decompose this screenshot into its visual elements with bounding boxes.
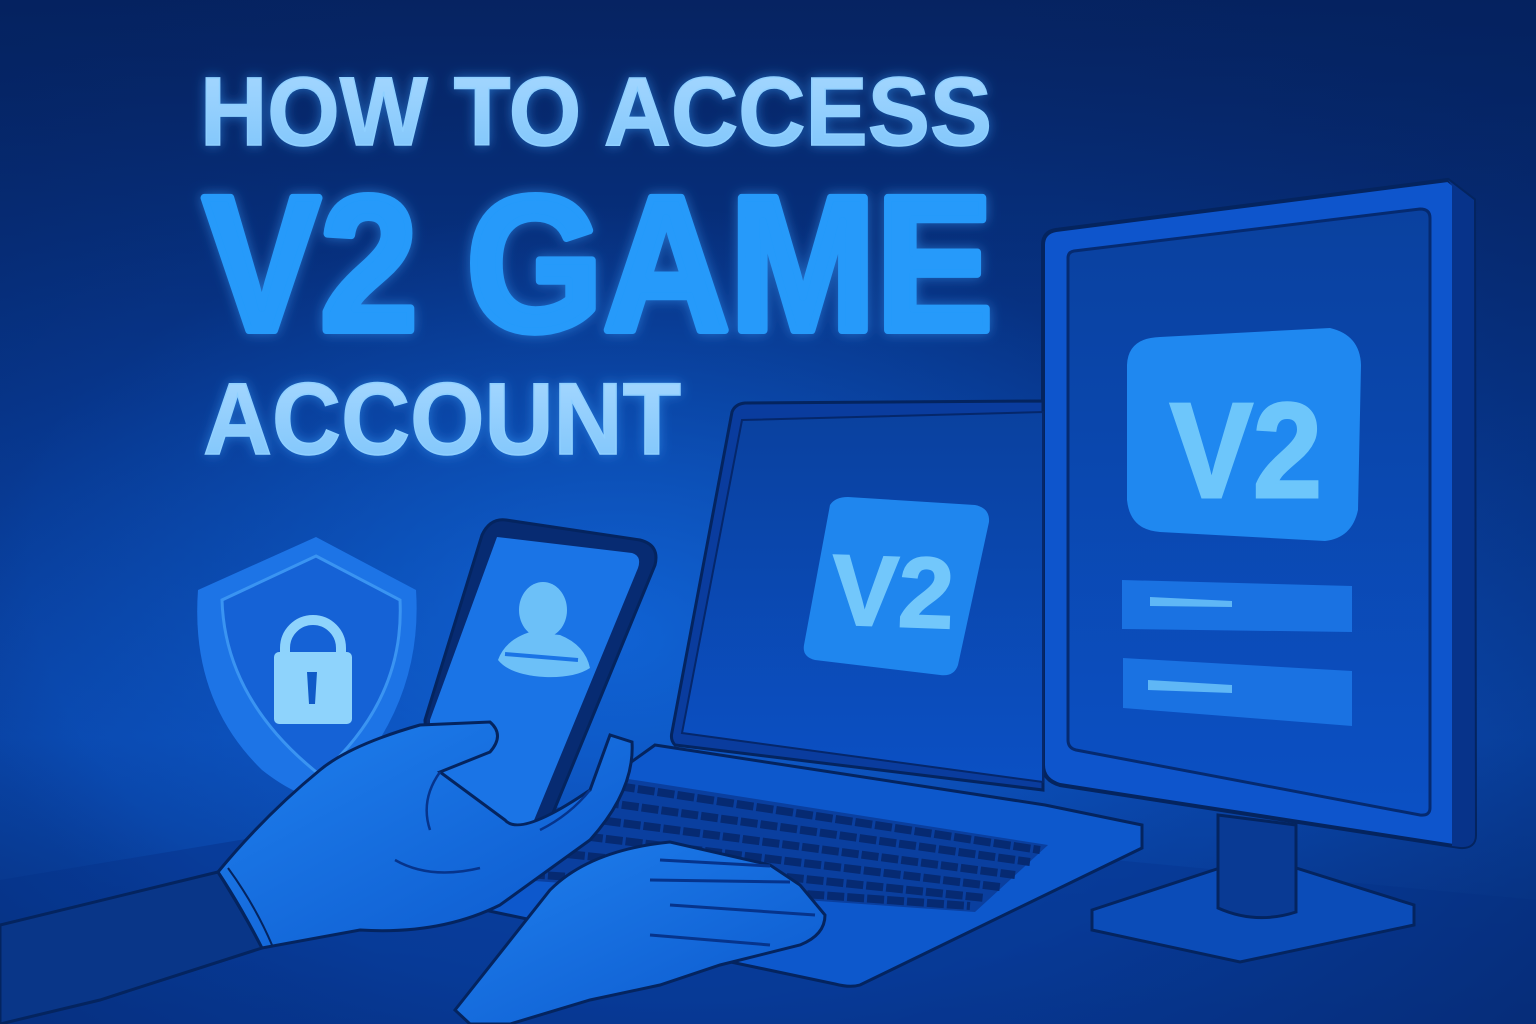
login field 2 bbox=[1123, 658, 1352, 726]
monitor screen bbox=[1068, 209, 1430, 815]
laptop bbox=[475, 401, 1142, 986]
finger creases bbox=[395, 772, 590, 872]
monitor v2 logo: V2 bbox=[1170, 375, 1322, 526]
laptop v2 logo: V2 bbox=[830, 534, 956, 650]
hand holding phone bbox=[218, 722, 632, 948]
monitor stand bbox=[1092, 815, 1414, 962]
monitor body bbox=[1043, 180, 1475, 847]
lock icon bbox=[274, 620, 352, 724]
title bbox=[200, 57, 993, 476]
phone bbox=[425, 520, 656, 839]
laptop keyboard bbox=[520, 778, 1048, 912]
laptop lid bbox=[671, 401, 1043, 790]
monitor v2 logo bbox=[1127, 328, 1361, 541]
phone screen bbox=[430, 537, 639, 830]
typing hand bbox=[455, 842, 825, 1024]
title line: account: ACCOUNT bbox=[203, 362, 681, 476]
laptop v2 logo bbox=[804, 497, 989, 675]
login field 1 bbox=[1122, 580, 1352, 632]
sleeve left bbox=[0, 872, 262, 1024]
phone body bbox=[425, 520, 656, 839]
monitor bbox=[1043, 180, 1475, 962]
user icon bbox=[498, 582, 590, 677]
shield icon bbox=[197, 537, 417, 800]
laptop screen bbox=[682, 412, 1043, 782]
title line: how to access: HOW TO ACCESS bbox=[200, 57, 992, 166]
hand cuff bbox=[228, 868, 272, 945]
title line: v2 game: V2 GAME bbox=[203, 156, 993, 371]
laptop base bbox=[475, 745, 1142, 986]
finger creases bbox=[650, 860, 815, 945]
